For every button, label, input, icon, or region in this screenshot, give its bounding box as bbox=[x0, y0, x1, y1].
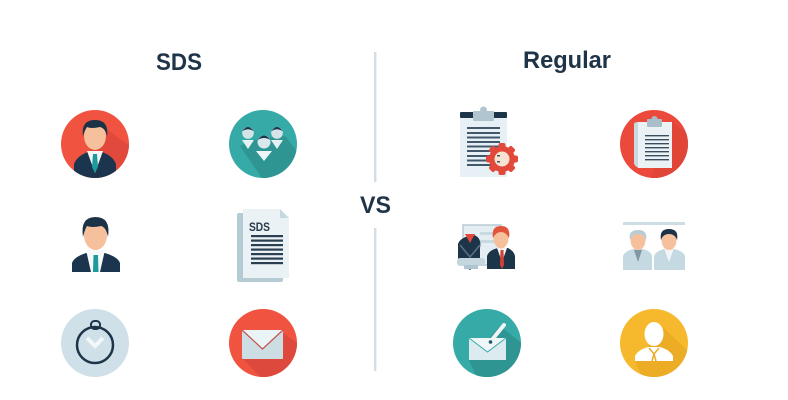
heading: Regular: Regular bbox=[523, 47, 611, 74]
icon: clipboard with gear bbox=[460, 106, 518, 177]
icon: team group in teal circle bbox=[229, 110, 297, 178]
icon: businessman in red circle bbox=[61, 110, 129, 178]
VS label: VS bbox=[360, 192, 391, 219]
right member bbox=[271, 127, 283, 149]
text lines bbox=[467, 127, 500, 166]
icon: meeting presenters with screen bbox=[457, 225, 515, 270]
icon: SDS document bbox=[237, 209, 289, 282]
icon: stopwatch bbox=[61, 309, 129, 377]
text lines bbox=[645, 135, 669, 160]
left member bbox=[242, 127, 254, 149]
heading: SDS: SDS bbox=[156, 49, 202, 76]
icon: two colleagues under a bar bbox=[623, 222, 685, 270]
gear bbox=[486, 143, 518, 175]
icon: manager silhouette in yellow circle bbox=[620, 309, 688, 377]
center member bbox=[256, 136, 272, 161]
icon: envelope in red circle bbox=[229, 309, 297, 377]
icon: envelope with pen in teal circle bbox=[453, 309, 521, 377]
icon: businessman bbox=[72, 217, 120, 272]
icon: clipboard in red circle bbox=[620, 110, 688, 178]
center divider bbox=[374, 52, 376, 371]
document label SDS: SDS bbox=[249, 222, 270, 234]
document lines bbox=[251, 235, 283, 264]
